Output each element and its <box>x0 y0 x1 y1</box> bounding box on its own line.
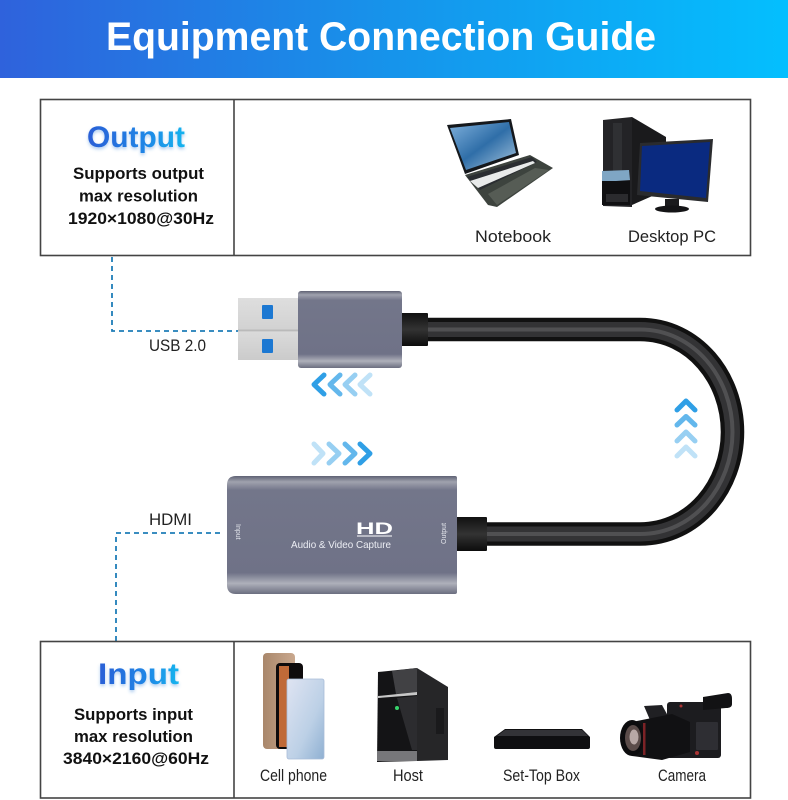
heading: output: Output <box>87 121 185 154</box>
output specification text: max resolution <box>79 186 198 206</box>
label: set-top box: Set-Top Box <box>503 766 580 785</box>
dashed line: USB to output <box>112 257 238 331</box>
device body <box>227 476 457 594</box>
icon: host <box>377 668 448 762</box>
icon: camera <box>620 693 732 760</box>
label: HDMI: HDMI <box>149 510 192 529</box>
cable <box>425 330 732 534</box>
heading: input: Input <box>98 658 179 691</box>
USB plug <box>238 291 428 368</box>
input specification text: max resolution <box>74 727 193 746</box>
USB strain relief <box>400 313 428 346</box>
HD logo: HD <box>356 519 393 538</box>
output specification text: Supports output <box>73 164 204 183</box>
panel: input <box>40 641 750 798</box>
icon: desktop PC <box>602 117 713 212</box>
USB metal connector <box>238 298 299 360</box>
label: host: Host <box>393 766 423 785</box>
title: Equipment Connection Guide <box>106 15 656 59</box>
icon: cell phone <box>263 653 324 759</box>
device strain relief <box>455 517 487 551</box>
output specification text <box>68 164 214 228</box>
device caption: Audio & Video Capture <box>291 539 391 551</box>
USB housing <box>298 291 402 368</box>
label: notebook: Notebook <box>475 227 552 246</box>
icon: notebook <box>447 119 553 207</box>
arrows: left toward USB <box>314 375 370 394</box>
icon: set-top box <box>494 729 590 749</box>
input specification text: Supports input <box>74 705 193 724</box>
title banner <box>0 0 788 78</box>
port label: input: Input <box>234 524 241 540</box>
port label: output: Output <box>441 523 448 544</box>
label: USB 2.0: USB 2.0 <box>149 336 206 355</box>
panel: output <box>40 99 750 256</box>
arrows: right from capture device <box>314 444 370 463</box>
arrows: up along cable <box>677 401 695 456</box>
output specification text: 1920×1080@30Hz <box>68 209 214 228</box>
label: cell phone: Cell phone <box>260 766 327 785</box>
USB blue contacts <box>262 305 273 353</box>
label: desktop PC: Desktop PC <box>628 227 716 246</box>
input specification text <box>63 705 209 768</box>
label: camera: Camera <box>658 766 706 785</box>
HD logo <box>356 519 393 538</box>
input specification text: 3840×2160@60Hz <box>63 749 209 768</box>
capture device <box>227 476 487 594</box>
dashed line: HDMI to input <box>116 533 222 641</box>
